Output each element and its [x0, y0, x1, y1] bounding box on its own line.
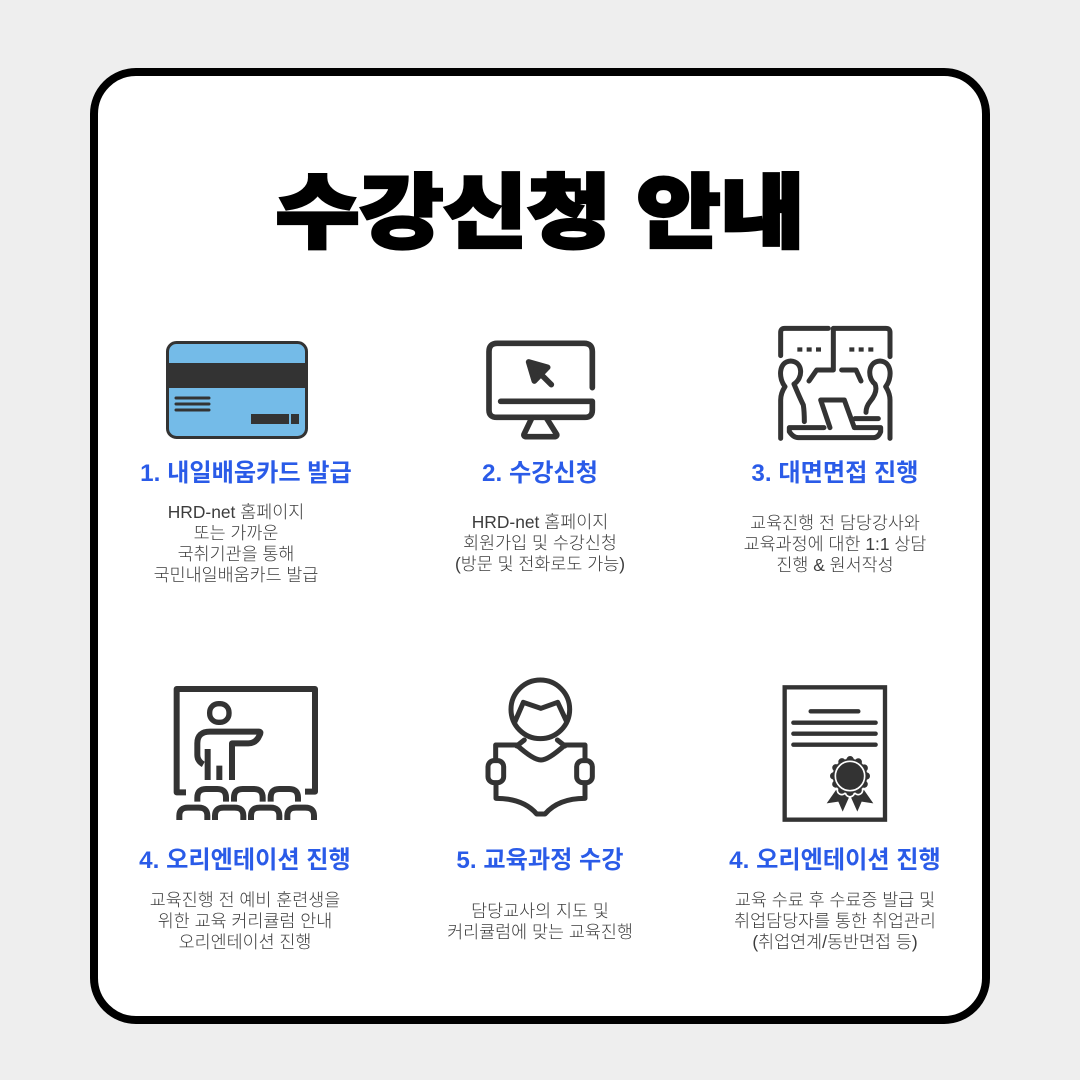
- icon: person reading book: [486, 678, 595, 816]
- text: step 1: 국민내일배움카드 발급: [154, 565, 318, 585]
- heading: step 5: 5. 교육과정 수강: [456, 847, 624, 874]
- text: step 4 certificate and employment: 취업담당자를 통한 취업관리: [734, 911, 936, 931]
- text: step 4 certificate and employment: [734, 890, 936, 952]
- text: step 4 orientation: 교육진행 전 예비 훈련생을: [150, 890, 340, 910]
- text: step 4 orientation: 오리엔테이션 진행: [179, 932, 311, 952]
- icon: face-to-face interview: [778, 326, 893, 441]
- text: step 4 certificate and employment: 교육 수료 후 수료증 발급 및: [735, 890, 935, 910]
- text: step 2: (방문 및 전화로도 가능): [455, 554, 625, 574]
- text: step 5: 커리큘럼에 맞는 교육진행: [447, 922, 633, 942]
- text: step 3: 교육과정에 대한 1:1 상담: [744, 534, 926, 554]
- title: 수강신청 안내: [276, 147, 804, 264]
- icon: teacher with audience: [174, 686, 318, 820]
- text: step 1: [154, 502, 318, 585]
- heading: step 4 certificate and employment: 4. 오리엔테이션 진행: [729, 847, 941, 874]
- text: step 1: HRD-net 홈페이지: [168, 502, 304, 522]
- heading: step 1: 1. 내일배움카드 발급: [140, 460, 352, 487]
- text: step 5: [447, 901, 633, 942]
- heading: step 4 orientation: 4. 오리엔테이션 진행: [139, 847, 351, 874]
- text: step 1: 또는 가까운: [194, 523, 278, 543]
- text: step 5: 담당교사의 지도 및: [471, 901, 609, 921]
- text: step 4 orientation: [150, 890, 340, 952]
- text: step 2: [455, 512, 625, 574]
- text: step 2: 회원가입 및 수강신청: [463, 533, 617, 553]
- text: step 2: HRD-net 홈페이지: [472, 512, 608, 532]
- text: step 3: 진행 & 원서작성: [776, 555, 894, 575]
- heading: step 2: 2. 수강신청: [482, 460, 598, 487]
- icon: certificate: [782, 685, 888, 822]
- text: step 1: 국취기관을 통해: [178, 544, 294, 564]
- icon: monitor with cursor: [486, 340, 596, 440]
- icon: credit card: [166, 341, 308, 439]
- text: step 4 certificate and employment: (취업연계/동반면접 등): [752, 932, 918, 952]
- text: step 4 orientation: 위한 교육 커리큘럼 안내: [158, 911, 332, 931]
- text: step 3: [744, 513, 926, 575]
- text: step 3: 교육진행 전 담당강사와: [750, 513, 920, 533]
- heading: step 3: 3. 대면면접 진행: [751, 460, 919, 487]
- panel: main card: [90, 68, 990, 1024]
